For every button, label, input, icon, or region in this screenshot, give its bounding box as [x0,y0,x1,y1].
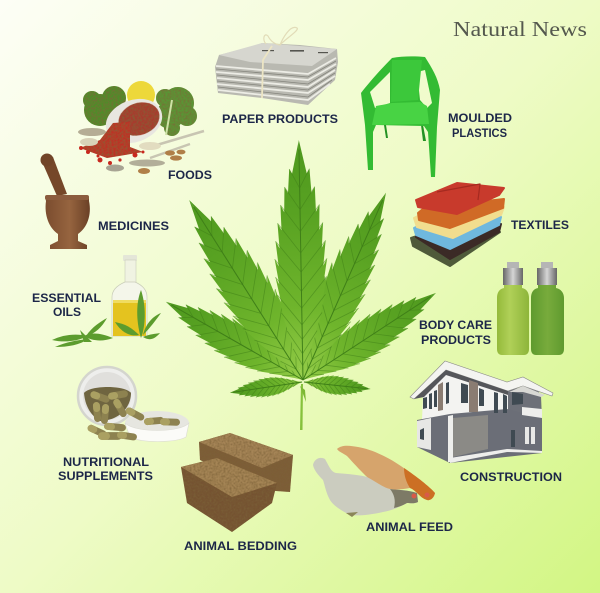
center leaflet [273,140,329,380]
small right leaflet [303,372,372,399]
label: moulded plastics [448,113,512,140]
central hemp leaf [156,140,447,430]
label: foods: FOODS [168,170,212,182]
leaf spur [300,386,306,402]
icon: foods and goji jar [78,81,204,174]
lower right leaflet [292,277,447,396]
label: medicines: MEDICINES [98,221,169,233]
label: moulded plastics: PLASTICS [452,128,507,140]
panel: foods [78,81,212,182]
panel: textiles [411,183,569,266]
icon: two green bottles [497,262,564,355]
lower left leaflet [156,285,313,397]
icon: two-storey house [410,361,553,463]
icon: hay bales [181,433,293,532]
icon: tied newspapers [215,27,338,105]
panel: moulded plastics [361,56,512,177]
label: nutritional supplements: NUTRITIONAL [63,457,149,469]
icon: capsule jar and dish [78,367,189,442]
panel: essential oils [32,255,161,347]
label: body care products: BODY CARE [419,320,492,332]
icon: stack of folded clothes [411,183,504,266]
label: moulded plastics: MOULDED [448,113,512,125]
small left leaflet [228,372,303,402]
panel: medicines [40,154,169,249]
icon: two hens [313,446,435,517]
icon: mortar and pestle [40,154,90,249]
panel: animal feed [313,446,453,534]
upper right leaflet [283,184,406,389]
panel: paper products [215,27,338,126]
icon: green chair [361,56,440,177]
label: paper products: PAPER PRODUCTS [222,114,338,126]
label: nutritional supplements: SUPPLEMENTS [58,471,153,483]
label: essential oils: ESSENTIAL [32,293,101,305]
panel: construction [410,361,562,484]
label: nutritional supplements [58,457,153,483]
leaf stem [300,384,303,430]
icon: oil bottle with hemp leaves [52,255,161,347]
panel: animal bedding [181,433,297,553]
label: animal feed: ANIMAL FEED [366,522,453,534]
panel: body care products [419,262,564,355]
label: body care products: PRODUCTS [421,335,491,347]
panel: nutritional supplements [58,367,189,483]
label: body care products [419,320,492,347]
label: construction: CONSTRUCTION [460,472,562,484]
upper left leaflet [168,186,325,394]
title: Natural News: Natural News [453,17,587,41]
label: essential oils: OILS [53,307,81,319]
label: animal bedding: ANIMAL BEDDING [184,541,297,553]
label: textiles: TEXTILES [511,220,569,232]
label: essential oils [32,293,101,319]
